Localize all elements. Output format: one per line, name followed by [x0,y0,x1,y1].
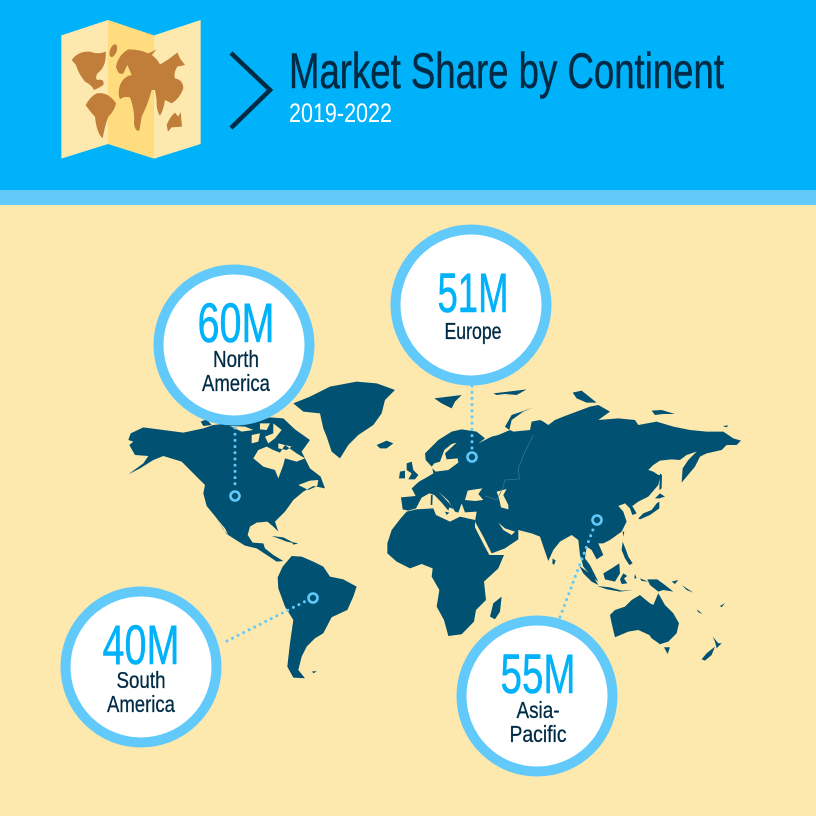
callout: South America [66,592,216,742]
callout: South America: America [107,691,175,717]
callout: Asia-Pacific: Pacific [510,721,566,747]
callout: South America: South [116,667,166,693]
eurasia, africa and oceania [387,389,741,661]
callout: North America: America [202,370,270,396]
connector: South America [227,594,318,641]
header band [0,0,816,205]
icon: chevron [231,53,270,128]
connector: North America [230,428,240,500]
callout: Asia-Pacific [462,620,612,772]
connector: Asia-Pacific [560,516,602,617]
callout: Europe [396,230,546,380]
callout: Europe: 51M [438,261,508,324]
connector: Europe [468,386,476,462]
world map [128,382,741,678]
callout: Asia-Pacific: 55M [500,642,576,705]
subtitle: 2019-2022 [289,98,392,128]
americas and greenland [128,382,395,678]
callout: Asia-Pacific: Asia- [516,697,560,723]
callout: Europe: Europe [444,318,502,344]
callout: North America: North [213,346,259,372]
callout: North America: 60M [198,291,274,354]
callout: North America [158,270,310,420]
callout: South America: 40M [102,613,180,676]
icon: folded map [61,20,201,159]
